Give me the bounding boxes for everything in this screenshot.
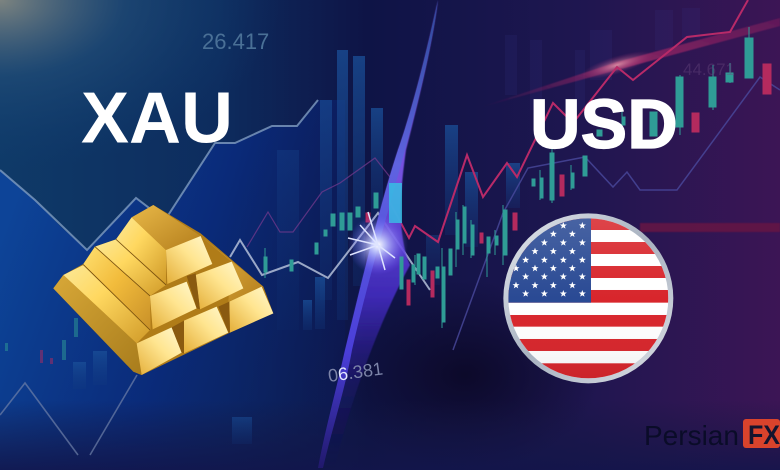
light wedge (318, 0, 438, 468)
blue volume bars (73, 50, 520, 444)
dark lower centre (330, 280, 600, 470)
faint candles lower left (5, 318, 78, 364)
number: 44.671: 44.671 (683, 60, 735, 79)
streak glow (578, 45, 656, 85)
logo: PersianFX: Persian (644, 420, 739, 451)
icon: US flag coin (503, 213, 673, 383)
number: 06.381: 06.381 (327, 358, 384, 386)
chart area under line (0, 100, 345, 470)
pink price line right (387, 0, 748, 242)
light price line (0, 100, 318, 250)
number: 26.417: 26.417 (202, 29, 269, 54)
cyan bar (389, 183, 402, 223)
title: USD: USD (530, 85, 678, 163)
purple-blue line right (453, 77, 780, 350)
logo: PersianFX (644, 419, 780, 451)
light price line middle (230, 213, 430, 290)
title: XAU: XAU (81, 78, 233, 158)
icon: gold bars (53, 205, 273, 375)
light streak (478, 18, 780, 108)
bottom fade (0, 400, 780, 470)
lower light line (0, 375, 137, 455)
pink price line left (247, 158, 390, 247)
candlesticks (5, 27, 771, 364)
sparkle (348, 212, 408, 275)
faint dark purple bars top (505, 8, 700, 110)
red band right of flag (640, 223, 780, 232)
